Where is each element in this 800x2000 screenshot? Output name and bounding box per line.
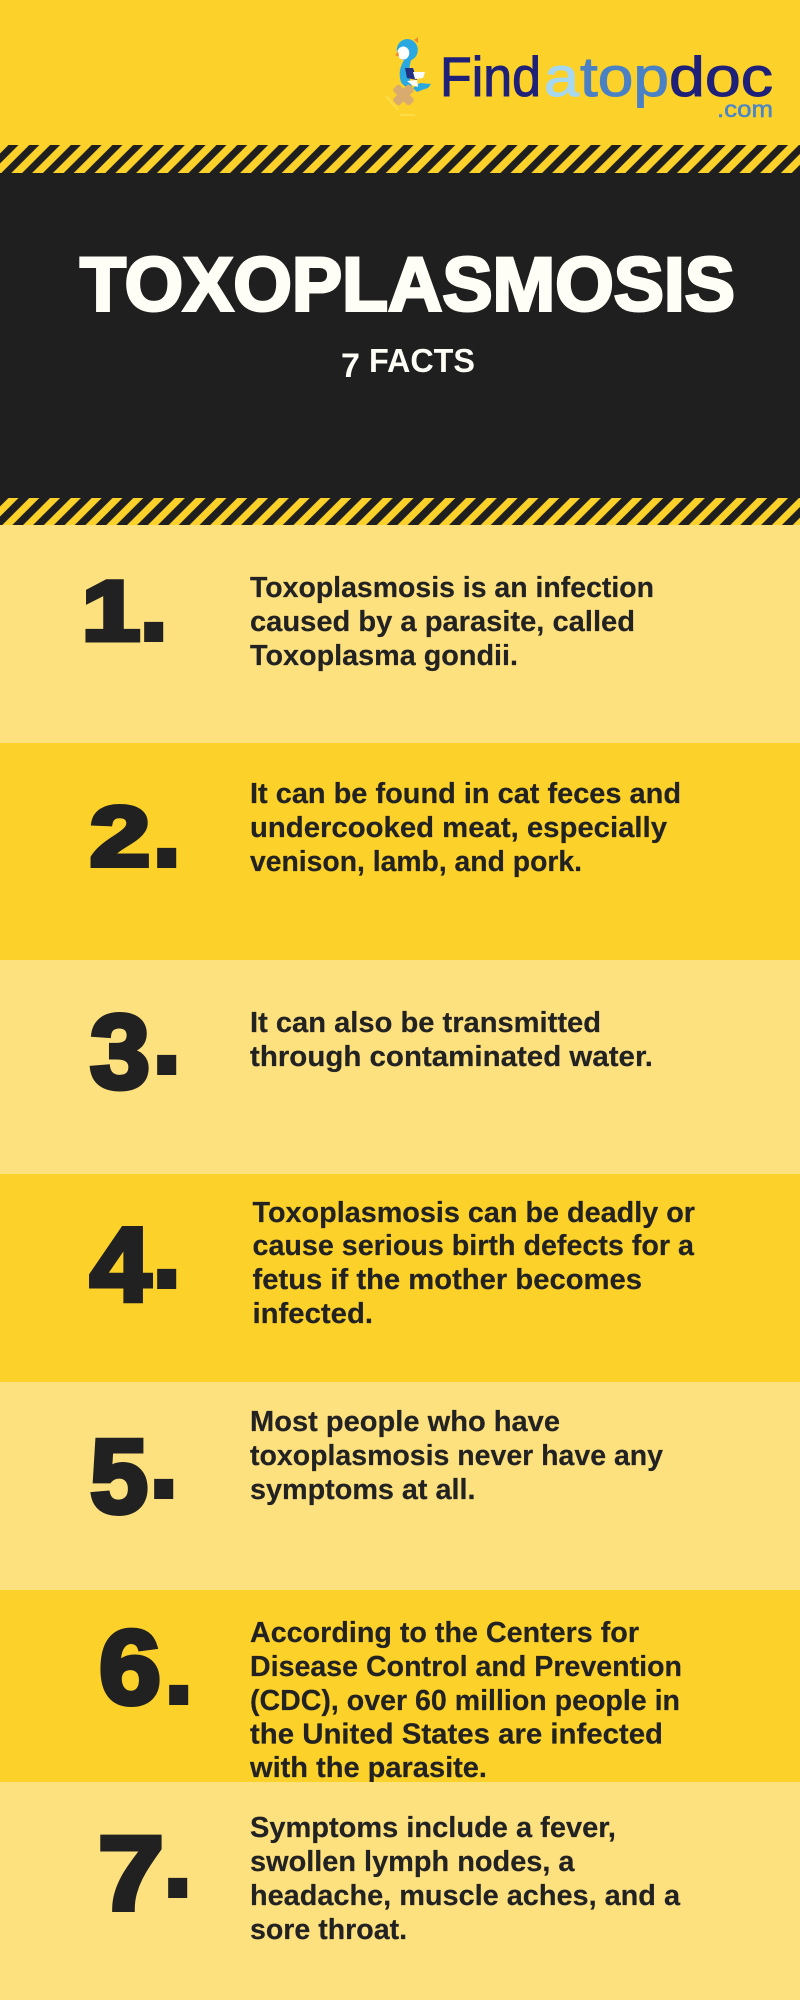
logo wordmark: a: [544, 45, 580, 108]
fact 1 text: [250, 572, 654, 672]
fact 3 text: through contaminated water.: [250, 1041, 653, 1073]
number 2: .: [148, 746, 186, 897]
fact 7 text: sore throat.: [250, 1914, 407, 1946]
subtitle: 7: [341, 347, 360, 385]
number 6: 6: [99, 1610, 161, 1726]
fact 7 text: [250, 1812, 681, 1946]
number 6: [99, 1583, 198, 1734]
number 1: [82, 520, 173, 671]
number 7: 7: [98, 1816, 164, 1932]
number 4: [90, 1167, 186, 1324]
number 5: 5: [90, 1418, 148, 1536]
top hazard stripes: [0, 145, 800, 173]
fact 3 text: It can also be transmitted: [250, 1007, 601, 1039]
fact 3 text: [250, 1007, 653, 1073]
fact 2 text: venison, lamb, and pork.: [250, 846, 582, 878]
logo wordmark: Find: [440, 45, 541, 108]
fact 1 text: Toxoplasma gondii.: [250, 640, 518, 672]
fact 6 text: the United States are infected: [250, 1718, 663, 1750]
fact 2 text: undercooked meat, especially: [250, 812, 667, 844]
title: TOXOPLASMOSIS: [80, 242, 735, 328]
icon: duck mascot with bandage: [386, 37, 431, 115]
panel: fact 3: [0, 953, 800, 1174]
fact 5 text: symptoms at all.: [250, 1474, 476, 1506]
fact 2 text: It can be found in cat feces and: [250, 778, 681, 810]
number 3: [90, 953, 186, 1111]
logo wordmark: .com: [717, 96, 773, 122]
fact 6 text: with the parasite.: [249, 1752, 487, 1784]
fact 4 text: [252, 1197, 695, 1330]
panel: fact 2: [0, 743, 800, 960]
number 7: .: [159, 1776, 197, 1927]
subtitle: [341, 342, 475, 385]
bottom hazard stripes: [0, 498, 800, 525]
fact 7 text: headache, muscle aches, and a: [250, 1880, 681, 1912]
fact 1 text: caused by a parasite, called: [250, 606, 635, 638]
fact 1 text: Toxoplasmosis is an infection: [250, 572, 654, 604]
logo wordmark: doc: [669, 45, 773, 108]
number 3: 3: [90, 994, 150, 1111]
panel: fact 6: [0, 1583, 800, 1784]
logo wordmark: [440, 45, 773, 122]
number 1: .: [135, 520, 173, 671]
number 1: 1: [82, 564, 140, 658]
number 5: .: [145, 1377, 183, 1528]
number 4: .: [148, 1167, 186, 1318]
fact 5 text: toxoplasmosis never have any: [250, 1440, 663, 1472]
fact 6 text: According to the Centers for: [250, 1617, 639, 1649]
number 7: [98, 1776, 197, 1932]
fact 4 text: cause serious birth defects for a: [252, 1230, 695, 1262]
number 4: 4: [90, 1206, 151, 1324]
fact 6 text: Disease Control and Prevention: [250, 1651, 682, 1683]
fact 4 text: fetus if the mother becomes: [252, 1264, 642, 1296]
subtitle: FACTS: [369, 342, 475, 379]
fact 4 text: Toxoplasmosis can be deadly or: [252, 1197, 695, 1229]
panel: fact 1: [0, 520, 800, 743]
panel: fact 4: [0, 1167, 800, 1382]
panel: title block: [0, 173, 800, 498]
number 6: .: [160, 1583, 198, 1734]
panel: logo header: [0, 0, 800, 145]
fact 7 text: Symptoms include a fever,: [250, 1812, 616, 1844]
fact 7 text: swollen lymph nodes, a: [250, 1846, 575, 1878]
fact 5 text: [250, 1406, 663, 1506]
panel: fact 7: [0, 1776, 800, 2000]
fact 5 text: Most people who have: [250, 1406, 560, 1438]
fact 2 text: [250, 778, 681, 878]
number 3: .: [148, 953, 186, 1104]
fact 4 text: infected.: [252, 1298, 373, 1330]
number 5: [90, 1377, 183, 1536]
number 2: 2: [90, 790, 150, 884]
logo wordmark: top: [580, 45, 669, 108]
panel: fact 5: [0, 1377, 800, 1590]
number 2: [90, 746, 186, 897]
fact 6 text: [249, 1617, 682, 1784]
fact 6 text: (CDC), over 60 million people in: [250, 1685, 680, 1717]
